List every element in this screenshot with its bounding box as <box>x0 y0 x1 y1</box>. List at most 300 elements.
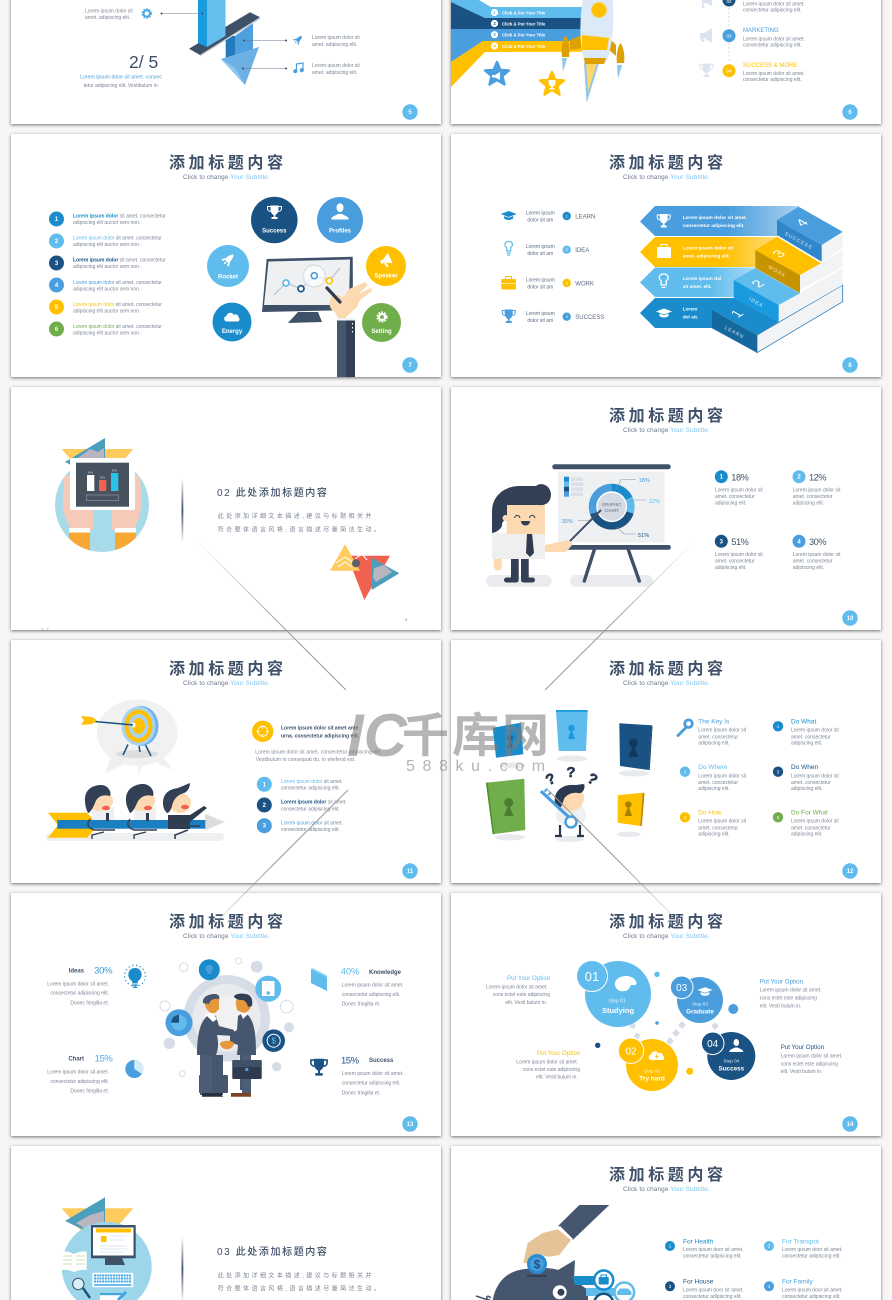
heading: Click to change Your Subtitle. <box>623 680 710 687</box>
book 2 idea: IDEA <box>748 297 764 309</box>
heading: Click to change Your Subtitle. <box>623 427 710 434</box>
step 01 studying: 01 <box>585 969 599 984</box>
stat: 12%: amet. consectetur <box>793 494 833 500</box>
numbered list: Lorem ipsum dolor sit amet. consectetur <box>73 258 166 264</box>
hand and sleeve <box>327 282 372 377</box>
decorative dots <box>595 972 738 1075</box>
page number <box>842 104 858 120</box>
list: for transpot: 2 <box>768 1244 771 1249</box>
item: do for what: Do For What <box>791 809 828 816</box>
list: for health: 1 <box>669 1244 672 1249</box>
ribbon labels <box>491 9 546 50</box>
panel: section 03 <box>11 1146 441 1300</box>
item: do when: Do When <box>791 764 818 771</box>
heading <box>609 153 727 181</box>
book 4 success <box>777 207 843 262</box>
option: top left: cons ectet este adipiscing <box>493 992 550 998</box>
page number: 13 <box>407 1122 414 1128</box>
banner: row 4: dol sit. <box>683 314 698 320</box>
bubble: rocket <box>207 245 249 287</box>
step 04 success: Lorem ipsum dolor sit amet. <box>743 71 805 77</box>
stat: success: consectetur adipiscing elit. <box>342 1081 400 1087</box>
book 4 success: SUCCESS <box>783 231 814 251</box>
icon: house <box>594 1294 613 1300</box>
heading <box>609 406 727 434</box>
illustration: piggy bank <box>476 1205 634 1300</box>
legend: idea: dolor sit am <box>527 251 553 257</box>
stat: 30%: amet. consectetur <box>793 559 833 565</box>
list: for health <box>665 1238 744 1260</box>
stat: chart: Chart <box>68 1057 84 1063</box>
decorative triangles <box>330 544 399 600</box>
stat: 12%: Lorem ipsum dolor sit <box>793 487 841 493</box>
list: for family: consectetur adipiscing elit. <box>782 1294 841 1300</box>
text: music note <box>312 63 360 76</box>
icon badge: bulb <box>199 959 220 980</box>
stat: knowledge: Donec fringilla et. <box>342 1002 380 1008</box>
book blue <box>493 723 523 758</box>
heading: 02 此处添加标题内容 <box>217 486 329 499</box>
body text: 符合整体语言风格,语言描述尽量简洁生动。 <box>218 1285 382 1293</box>
list item 2: Lorem ipsum dolor sit amet. <box>281 800 347 806</box>
bubble: setting: Setting <box>371 329 392 335</box>
panel: slide 13 <box>11 893 441 1136</box>
illustration: target speech bubble <box>81 699 178 775</box>
item: the key is: adipiscing elit. <box>698 741 730 747</box>
text: music note: Lorem ipsum dolor sit <box>312 63 360 69</box>
item: do for what: 5 <box>777 815 780 820</box>
list: for family: 4 <box>768 1284 771 1289</box>
stat: 12% <box>792 470 841 506</box>
character: confused man with key <box>540 764 600 836</box>
stat: 51%: adipiscing elit. <box>715 565 746 571</box>
text: gear note <box>85 8 133 21</box>
legend: idea: IDEA <box>575 248 589 254</box>
stat: 18%: adipiscing elit. <box>715 500 746 506</box>
numbered list: 6 <box>55 327 59 333</box>
heading: 添加标题内容 <box>609 659 727 678</box>
list: for transpot: For Transpot <box>782 1238 819 1245</box>
stat: 51%: 51% <box>731 537 749 547</box>
banner: row 1: Lorem ipsum dolor sit amet. <box>683 215 747 221</box>
pig eye <box>553 1285 567 1299</box>
list: for house: 3 <box>669 1284 672 1289</box>
chart: isometric arrows <box>189 0 260 85</box>
text: paragraph <box>255 749 382 763</box>
list item 3: consectetur adipiscing elit. <box>281 827 340 833</box>
page number <box>842 1116 858 1132</box>
book 4 success: 4 <box>791 216 812 228</box>
number: 2/5: 2/ 5 <box>129 52 158 72</box>
option: bottom left: Put Your Option <box>537 1050 581 1057</box>
list item 1 <box>257 777 343 792</box>
body text: 此处添加详细文本描述,建议与标题相关并 <box>218 1271 374 1279</box>
stat: chart: Donec fringilla et. <box>70 1089 109 1095</box>
step 02 <box>702 0 805 14</box>
legend: learn: LEARN <box>575 214 595 220</box>
page number: 7 <box>408 363 412 369</box>
bubble: profiles <box>317 197 363 243</box>
stat: 51% <box>715 535 763 571</box>
stat: 30%: 30% <box>809 537 826 547</box>
stat: 12%: 2 <box>797 475 801 481</box>
icon: gear <box>142 9 151 18</box>
man right <box>220 994 262 1097</box>
illustration: team riding arrow <box>46 783 225 841</box>
item: do how: Do How <box>698 809 722 816</box>
item: do where: adipiscing elit. <box>698 786 730 792</box>
rider 3 <box>163 783 207 839</box>
item: do where: amet. consectetur <box>698 780 738 786</box>
list item 2 <box>257 798 347 812</box>
page number: 8 <box>848 363 852 369</box>
bubble: energy <box>212 302 252 342</box>
stat: 12%: 12% <box>809 472 826 482</box>
book 3 work <box>755 237 843 293</box>
option: bottom right: cons ectet este adipiscing <box>781 1061 838 1067</box>
item: do what: adipiscing elit. <box>791 741 822 747</box>
step 03 graduate <box>670 976 723 1023</box>
option: top left: elit. Vesti bulum in. <box>505 1000 547 1006</box>
ribbon labels: Click & Put Your Title <box>502 10 546 15</box>
ribbon labels: Click & Put Your Title <box>502 33 546 38</box>
illustration: tablet in hands: 30% <box>112 468 118 472</box>
numbered list: adipiscing elit auctor sem non. <box>73 264 140 270</box>
item: do for what: Lorem ipsum dolor sit <box>791 819 839 825</box>
stat: 12%: adipiscing elit. <box>793 500 824 506</box>
stat: ideas: Donec fringilla et. <box>70 1000 109 1006</box>
heading: Click to change Your Subtitle. <box>623 174 710 181</box>
stat: chart <box>47 1054 113 1095</box>
list: for family: For Family <box>782 1278 813 1285</box>
icon: yellow star <box>540 72 564 94</box>
heading <box>609 912 727 940</box>
book dark blue <box>619 723 652 770</box>
step 02 try hard: 02 <box>625 1046 637 1058</box>
item: do for what: amet. consectetur <box>791 825 831 831</box>
numbered list: adipiscing elit auctor sem non. <box>73 242 140 248</box>
list: for house: consectetur adipiscing elit. <box>683 1294 742 1300</box>
legend: idea: Lorem ipsum <box>526 244 555 250</box>
stat: success: Success <box>369 1058 394 1064</box>
option: bottom left: cons ectet este adipiscing <box>523 1067 580 1073</box>
stat: knowledge: Lorem ipsum dolor sit amet. <box>342 983 403 989</box>
page number <box>402 863 418 879</box>
stat: chart: Lorem ipsum dolor sit amet. <box>47 1070 109 1076</box>
book 1 learn: LEARN <box>723 325 745 341</box>
magnifier <box>73 1278 90 1298</box>
panel: slide 7 <box>11 134 441 377</box>
text: music note: amet. adipiscing elit. <box>312 70 357 76</box>
heading: 添加标题内容 <box>169 153 287 172</box>
page number <box>402 104 418 120</box>
item: do for what <box>773 809 839 838</box>
item: the key is: Lorem ipsum dolor sit <box>698 728 747 734</box>
list: for health: consectetur adipiscing elit. <box>683 1254 742 1260</box>
step 02: consectetur adipiscing elit. <box>743 8 802 14</box>
list: for family: Lorem ipsum door sit amet. <box>782 1287 843 1293</box>
book 3 work: WORK <box>767 265 787 279</box>
numbered list: adipiscing elit auctor sem non. <box>73 308 140 314</box>
text: rocket note <box>312 35 360 48</box>
heading <box>169 659 287 687</box>
donut labels: 30% <box>562 519 573 525</box>
text: progress caption: Lorem ipsum dolor sit amet. consec <box>80 74 162 80</box>
numbered list: Lorem ipsum dolor sit amet. consectetur <box>73 214 166 220</box>
easel with donut chart <box>486 464 671 587</box>
stat: success: 15% <box>341 1055 360 1066</box>
step 02 try hard: Step 02 <box>644 1068 660 1073</box>
numbered list: Lorem ipsum dolor sit amet. consectetur <box>73 236 162 242</box>
text: paragraph: Lorem ipsum dolor sit amet. consectetur adipiscing elit. <box>255 749 382 755</box>
option: bottom left: Lorem ipsum dolor sit amet. <box>516 1059 578 1065</box>
item: the key is: The Key Is <box>698 718 730 725</box>
stat: chart: consectetur adipiscing elit. <box>50 1079 109 1085</box>
list: for health: For Health <box>683 1238 714 1245</box>
book 2 idea <box>734 268 843 322</box>
item: do what: amet. consectetur <box>791 734 831 740</box>
book green <box>486 779 525 834</box>
numbered list: 1 <box>55 217 59 223</box>
step 03 graduate: Graduate <box>686 1008 714 1015</box>
legend: idea: 2 <box>566 247 569 252</box>
icon: bulb <box>125 965 145 987</box>
list item 1: consectetur adipiscing elit. <box>281 786 340 792</box>
item: do when: amet. consectetur <box>791 780 831 786</box>
step 01 studying <box>576 960 651 1027</box>
step 02 try hard: Try hard <box>639 1075 665 1082</box>
heading: Click to change Your Subtitle. <box>623 933 710 940</box>
panel: slide 12 <box>451 640 881 883</box>
step 02 try hard <box>618 1038 678 1091</box>
heading <box>169 153 287 181</box>
sleeve and hand <box>523 1205 609 1263</box>
stat: knowledge: Knowledge <box>369 970 402 976</box>
body text <box>218 512 382 534</box>
illustration: tablet in hands: 60% <box>88 470 94 474</box>
panel: slide 16 <box>451 1146 881 1300</box>
stat: knowledge <box>341 967 403 1008</box>
bubble: speaker: Speaker <box>374 274 398 280</box>
item: do when: adipiscing elit. <box>791 786 822 792</box>
numbered list: adipiscing elit auctor sem non. <box>73 220 140 226</box>
banner: row 4 <box>640 298 733 328</box>
panel: slide 10 <box>451 387 881 630</box>
numbered list: 2 <box>55 239 59 245</box>
stat: ideas <box>47 966 113 1006</box>
divider <box>182 478 183 543</box>
easel with donut chart: CHART <box>604 508 619 513</box>
watermark: logo: 千库网 <box>402 697 552 766</box>
heading: 添加标题内容 <box>169 659 287 678</box>
icon: medical kit <box>594 1270 613 1290</box>
ribbon labels: 3 <box>493 32 496 37</box>
item: do where <box>680 764 747 792</box>
heading: 添加标题内容 <box>609 406 727 425</box>
character: presenter <box>492 484 573 582</box>
step 03 graduate: 03 <box>676 983 688 994</box>
option: top left: Lorem ipsum dolor sit amet. <box>486 984 548 990</box>
watermark: logo <box>347 697 553 775</box>
legend: success: dolor sit am <box>527 318 553 324</box>
page number <box>402 357 418 373</box>
banner: row 1: consectetur adipiscing elit. <box>683 223 745 229</box>
page number <box>842 863 858 879</box>
stat: 30%: adipiscing elit. <box>793 565 824 571</box>
panel: slide 14 <box>451 893 881 1136</box>
heading <box>169 912 287 940</box>
numbered list: Lorem ipsum dolor sit amet. consectetur <box>73 324 162 330</box>
illustration: computer and desk items <box>62 1197 152 1300</box>
leader lines <box>160 12 287 70</box>
option: bottom right <box>781 1044 842 1075</box>
icon: rocket <box>292 33 305 46</box>
illustration: tablet in hands <box>55 438 149 554</box>
bubble: success: Success <box>262 229 287 235</box>
coin <box>527 1254 547 1277</box>
legend: work: dolor sit am <box>527 284 553 290</box>
step 01 studying: Studying <box>602 1006 634 1015</box>
list: for health: Lorem ipsum door sit amet. <box>683 1247 744 1253</box>
page number <box>842 610 858 626</box>
option: top left <box>486 975 551 1006</box>
stat: ideas: Lorem ipsum dolor sit amet. <box>47 981 109 987</box>
callout: goal: urna. consectetur adipiscing elit. <box>281 734 360 740</box>
heading: 03 此处添加标题内容 <box>217 1245 329 1258</box>
page number: 11 <box>407 869 414 875</box>
numbered list: Lorem ipsum dolor sit amet. consectetur <box>73 280 162 286</box>
heading: 添加标题内容 <box>169 912 287 931</box>
orbit dots <box>164 961 294 1071</box>
ribbon labels: 2 <box>493 21 496 26</box>
page number <box>402 1116 418 1132</box>
donut labels <box>562 478 660 539</box>
page number: 6 <box>848 110 852 116</box>
list: for transpot: Lorem ipsum door sit amet. <box>782 1247 843 1253</box>
page number <box>842 357 858 373</box>
item: do how: amet. consectetur <box>698 825 738 831</box>
list item 2: consectetur adipiscing elit. <box>281 806 340 812</box>
stat: 18%: 1 <box>720 475 724 481</box>
easel with donut chart: GRAPHIC <box>602 502 621 507</box>
icon: blue star <box>485 62 509 84</box>
panel: slide 11 <box>11 640 441 883</box>
item: do how: adipiscing elit. <box>698 832 730 838</box>
legend: work: WORK <box>575 282 594 288</box>
watermark: diagonal lines <box>197 540 696 935</box>
callout: goal <box>252 721 360 742</box>
stat: 18%: Lorem ipsum dolor sit <box>715 487 763 493</box>
coin: $ <box>534 1258 541 1272</box>
stat: 51%: amet. consectetur <box>715 559 755 565</box>
panel: slide 5 <box>11 0 441 124</box>
text: paragraph: Vestibulum in consequat du. in eleifend est. <box>256 757 356 763</box>
timeline <box>700 0 805 83</box>
heading: Click to change Your Subtitle. <box>623 1186 710 1193</box>
stat: 51%: 3 <box>720 539 724 545</box>
banner: row 2: Lorem ipsum dolor sit <box>683 246 733 252</box>
list item 3 <box>257 818 343 833</box>
option: bottom right: Lorem ipsum dolor sit amet. <box>781 1054 842 1060</box>
watermark: logo: 588ku.com <box>406 758 553 775</box>
numbered list <box>49 212 166 336</box>
orbit rings <box>160 958 293 1077</box>
legend: success: 4 <box>566 314 569 319</box>
list: for transpot: consectetur adipiscing elit. <box>782 1254 841 1260</box>
step 02: Lorem ipsum dolor sit amet. <box>743 2 805 8</box>
bubble: rocket: Rocket <box>218 275 238 281</box>
heading <box>609 1165 727 1193</box>
legend: work: Lorem ipsum <box>526 278 555 284</box>
divider <box>182 1237 183 1300</box>
numbered list: 3 <box>55 261 59 267</box>
numbered list: Lorem ipsum dolor sit amet. consectetur <box>73 302 162 308</box>
stat: success: Lorem ipsum dolor sit amet. <box>342 1071 403 1077</box>
bubble: setting <box>362 303 401 342</box>
numbered list: 5 <box>55 305 59 311</box>
icon: book <box>311 968 327 991</box>
step 03 marketing: Lorem ipsum dolor sit amet. <box>743 36 805 42</box>
banner: row 2: amet. adipiscing elit. <box>683 254 730 260</box>
heading: Click to change Your Subtitle. <box>183 933 270 940</box>
ribbon labels: 4 <box>493 44 496 48</box>
stat: ideas: Ideas <box>69 969 85 975</box>
stat: chart: 15% <box>95 1054 113 1065</box>
heading <box>609 659 727 687</box>
item: the key is <box>698 718 747 747</box>
text: progress caption <box>80 74 162 89</box>
legend: success: SUCCESS <box>575 315 604 321</box>
keyboard <box>92 1273 133 1287</box>
page number: 5 <box>408 110 412 116</box>
step 04 success: 04 <box>707 1039 719 1050</box>
step 03 marketing <box>700 28 805 48</box>
list item 2: 2 <box>263 803 267 809</box>
man left <box>197 994 234 1097</box>
icon badge: document <box>255 976 281 1002</box>
heading: 添加标题内容 <box>609 153 727 172</box>
watermark: logo: IC <box>347 702 409 769</box>
list: for family <box>764 1278 843 1300</box>
donut <box>592 488 631 526</box>
legend: learn <box>501 210 595 224</box>
item: do how <box>680 809 747 838</box>
option: bottom right: Put Your Option <box>781 1044 825 1051</box>
stat: 30%: Lorem ipsum dolor sit <box>793 552 841 558</box>
ribbon labels: Click & Put Your Title <box>502 22 546 26</box>
banner: row 2 <box>640 237 779 267</box>
heading: 添加标题内容 <box>609 912 727 931</box>
body text: 此处添加详细文本描述,建议与标题相关并 <box>218 512 374 520</box>
callout: goal: Lorem ipsum dolor sit amet ante <box>281 726 358 732</box>
stat: ideas: 30% <box>94 966 113 976</box>
page number: 12 <box>847 869 854 875</box>
step 04 success: consectetur adipiscing elit. <box>743 77 802 83</box>
option: top left: Put Your Option <box>507 975 551 982</box>
legend: learn: 1 <box>566 214 569 218</box>
legend: learn: dolor sit am <box>527 218 553 224</box>
legend <box>564 477 583 497</box>
list item 3: 3 <box>263 824 267 830</box>
book 1 learn <box>712 285 843 353</box>
stat: 18% <box>715 470 763 506</box>
step 03 marketing: consectetur adipiscing elit. <box>743 42 802 48</box>
bubble: energy: Energy <box>222 329 243 335</box>
banner: row 1 <box>640 206 799 236</box>
book 3 work: 3 <box>768 247 789 259</box>
icon: trophy <box>311 1059 327 1076</box>
book yellow <box>618 793 644 826</box>
